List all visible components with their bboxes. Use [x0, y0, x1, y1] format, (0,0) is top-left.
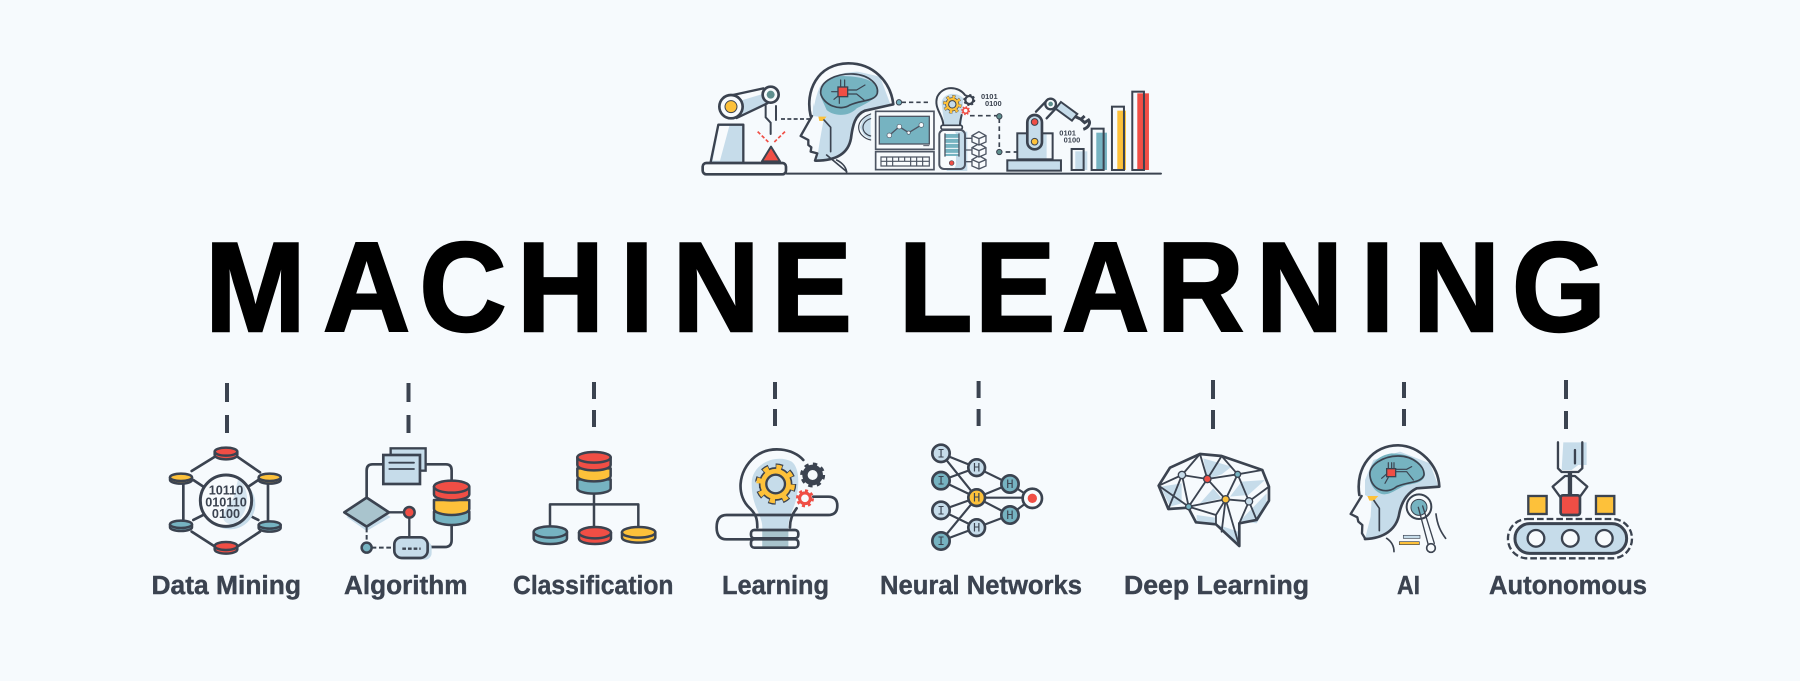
- dashed connector to robot: [970, 114, 1017, 155]
- panel: autonomous: [1489, 380, 1647, 600]
- dashed connector: [1402, 382, 1406, 426]
- dashed connector: [773, 382, 777, 426]
- ground line: [787, 171, 1161, 177]
- dashed connector: [592, 382, 596, 427]
- icon: classification tree: [534, 452, 655, 544]
- icon: polygon brain: [1159, 454, 1269, 546]
- icon: neural network: H: [1006, 477, 1014, 492]
- label: Neural Networks: [880, 572, 1082, 600]
- computer monitor with chart: [876, 111, 934, 170]
- panel: learning: [717, 382, 837, 600]
- binary text by bars upper: 0101: [1059, 129, 1076, 138]
- icon: light bulb with gears: [717, 449, 837, 548]
- bar chart: [1072, 92, 1149, 170]
- server tower and cubes: [939, 130, 986, 171]
- dashed connector: [1564, 380, 1568, 429]
- icon: data mining network: 0100: [212, 507, 240, 521]
- binary text by bars lower: 0100: [1064, 136, 1080, 145]
- head with brain chip: [801, 63, 893, 173]
- binary text upper: 0101: [981, 92, 998, 101]
- icon: neural network: I: [937, 446, 945, 461]
- icon: neural network: [932, 445, 1042, 550]
- panel: ai: [1351, 382, 1446, 600]
- icon: neural network: I: [937, 534, 945, 549]
- label: Autonomous: [1489, 572, 1647, 600]
- label: Learning: [722, 572, 829, 600]
- title: MACHINE LEARNING: [205, 217, 1606, 359]
- icon: neural network: I: [937, 474, 945, 489]
- dashed connector: [225, 383, 229, 433]
- label: Data Mining: [152, 572, 301, 600]
- label: Algorithm: [344, 572, 468, 600]
- icon: autonomous conveyor robot: [1508, 442, 1632, 558]
- dashed connector: [406, 383, 410, 433]
- icon: neural network: H: [973, 491, 980, 506]
- binary text lower: 0100: [985, 99, 1002, 108]
- panel: classification: [513, 382, 674, 600]
- dashed connector: [1211, 380, 1215, 429]
- label: AI: [1397, 572, 1420, 600]
- top illustration: machine learning pipeline: [703, 63, 1161, 174]
- icon: algorithm flowchart: [344, 448, 469, 560]
- robot arm right: [1007, 99, 1089, 171]
- icon: neural network: H: [1006, 508, 1014, 523]
- robot arm left: [703, 87, 786, 174]
- label: Classification: [513, 572, 674, 600]
- icon: neural network: H: [973, 521, 980, 536]
- link dot to bulb: [896, 100, 930, 105]
- icon: data mining network: [170, 448, 281, 554]
- dashed connector: [977, 381, 981, 426]
- panel: algorithm: [344, 383, 469, 600]
- light bulb with gears: [936, 88, 974, 129]
- panel: neural networks: [880, 381, 1082, 600]
- icon: data mining network: 010110: [205, 495, 247, 509]
- icon: neural network: H: [973, 461, 980, 476]
- panel: deep learning: [1124, 380, 1309, 600]
- label: Deep Learning: [1124, 572, 1309, 600]
- icon: data mining network: 10110: [209, 484, 243, 498]
- icon: neural network: I: [937, 503, 945, 518]
- dashed link robot to head: [781, 116, 810, 121]
- icon: ai head: [1351, 445, 1446, 552]
- panel: data mining: [152, 383, 301, 600]
